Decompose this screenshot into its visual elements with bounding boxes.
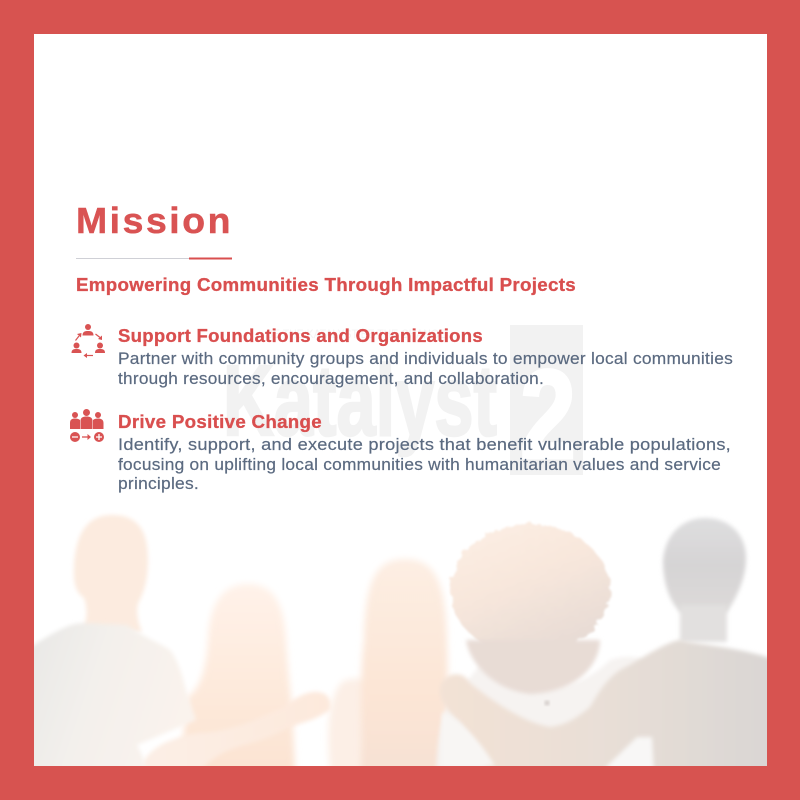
item 1 body: through resources, encouragement, and collaboration.: [118, 369, 544, 388]
person 4: lower hair: [466, 640, 600, 694]
background photo: group of people from behind: [34, 514, 767, 766]
person 4: white blouse under arm: [442, 712, 495, 766]
person 5: head: [663, 518, 746, 612]
item 2 body: Identify, support, and execute projects that benefit vulnerable populations,: [118, 435, 731, 454]
item 1 heading: Support Foundations and Organizations: [118, 326, 483, 346]
person 5: neck: [680, 605, 727, 642]
person 1: head and neck: [74, 515, 148, 632]
item 1 body: [118, 349, 733, 388]
item 1 body: Partner with community groups and individuals to empower local communities: [118, 349, 733, 368]
watermark: Katalyst 2 logo: [223, 325, 583, 485]
item 2 body: principles.: [118, 474, 199, 493]
person 1: arm over shoulder: [144, 690, 331, 766]
subtitle: Empowering Communities Through Impactful Projects: [76, 275, 576, 295]
person 3: long hair: [359, 557, 450, 766]
watermark numeral: 2: [520, 344, 576, 485]
item 2 body: [118, 435, 731, 493]
title divider: [76, 258, 232, 260]
person 3: shoulder: [327, 678, 363, 766]
person 4: white blouse: [436, 658, 636, 766]
person 5: white gap under arm: [606, 736, 655, 766]
person 4: blouse button: [544, 700, 550, 706]
icon: people with minus to plus: [70, 409, 104, 442]
title: Mission: [76, 200, 233, 241]
watermark word: Katalyst: [223, 345, 497, 457]
watermark box with numeral: [510, 325, 583, 475]
person 1: white t-shirt: [34, 622, 196, 766]
item 2 heading: Drive Positive Change: [118, 412, 322, 432]
watermark small tagline: BE THE KATALYST BE THE CHANGE: [266, 327, 446, 341]
person 4: curly hair: [450, 524, 610, 656]
person 5: shirt and arm around shoulder: [442, 639, 767, 766]
icon: people in a cycle: [72, 324, 105, 358]
item 1: support foundations: [72, 324, 733, 388]
item 2: drive positive change: [70, 409, 731, 493]
item 2 body: focusing on uplifting local communities with humanitarian values and service: [118, 455, 721, 474]
person 2: long hair: [181, 583, 298, 766]
